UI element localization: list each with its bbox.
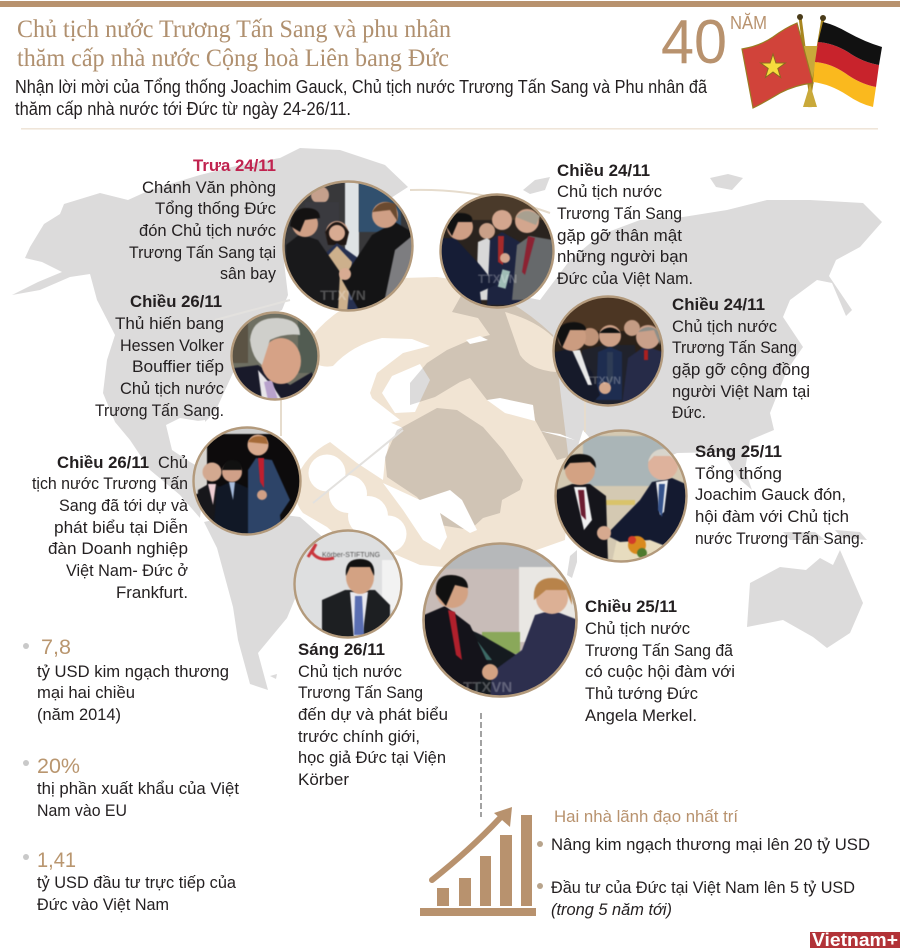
text: Chiều 26/11 forum: Frankfurt. (116, 583, 188, 602)
text: Chiều 26/11 forum: Việt Nam- Đức ở (66, 561, 188, 580)
40 years badge: NĂM (730, 13, 767, 33)
text: Chiều 26/11 forum: Sang đã tới dự và (59, 496, 189, 515)
text: Chiều 24/11 community (672, 295, 810, 422)
australia (747, 550, 863, 648)
title (17, 16, 451, 72)
text: Chiều 25/11: Trương Tấn Sang đã (585, 641, 734, 660)
text: Chiều 24/11 friends: những người bạn (557, 247, 688, 266)
agreement panel: Nâng kim ngạch thương mại lên 20 tỷ USD (551, 835, 870, 854)
text: Sáng 25/11: nước Trương Tấn Sang. (695, 529, 864, 548)
intro text: Nhận lời mời của Tổng thống Joachim Gauck, Chủ tịch nước Trương Tấn Sang và Phu nhân đã (15, 77, 708, 97)
text: Chiều 24/11 friends (557, 161, 693, 288)
text: Sáng 25/11: Tổng thống (695, 464, 782, 483)
text: Chiều 24/11 friends: Chiều 24/11 (557, 161, 650, 180)
north and central america (12, 148, 408, 518)
text: Chiều 24/11 community: Trương Tấn Sang (672, 338, 797, 357)
stat: 20%: thị phần xuất khẩu của Việt (37, 779, 239, 798)
title: Chủ tịch nước Trương Tấn Sang và phu nhân (17, 16, 451, 43)
photo: Chiều 26/11 Bouffier (232, 312, 320, 401)
text: Chiều 25/11: có cuộc hội đàm với (585, 662, 735, 681)
text: Chiều 26/11 Bouffier: Hessen Volker (120, 336, 224, 355)
text: Chiều 26/11 forum: Chủ (158, 453, 188, 472)
connecting lines (215, 190, 585, 503)
text: Chiều 26/11 forum (32, 453, 189, 602)
icon: crossed flags (742, 14, 882, 108)
photo: Trưa 24/11 (284, 182, 412, 312)
madagascar (567, 550, 577, 578)
text: Chiều 26/11 forum: đàn Doanh nghiệp (48, 539, 188, 558)
stat: 7,8: (năm 2014) (37, 705, 121, 724)
text: Chiều 25/11: Chủ tịch nước (585, 619, 690, 638)
text: Sáng 26/11: học giả Đức tại Viện (298, 748, 446, 767)
eurasia (410, 200, 882, 490)
text: Chiều 26/11 Bouffier: Bouffier tiếp (132, 357, 224, 376)
text: Chiều 26/11 forum: Chiều 26/11 (57, 453, 149, 472)
text: Sáng 26/11: Körber (298, 770, 349, 789)
text: Chiều 24/11 friends: gặp gỡ thân mật (557, 226, 682, 245)
stat: 1,41: Đức vào Việt Nam (37, 895, 169, 914)
africa (385, 408, 523, 530)
text: Trưa 24/11: Trương Tấn Sang tại (129, 243, 276, 262)
photo: Sáng 25/11 (556, 430, 688, 563)
text: Sáng 25/11: Sáng 25/11 (695, 442, 782, 461)
top bar (0, 1, 900, 7)
40 years badge: 40 (661, 8, 727, 77)
text: Sáng 26/11: Trương Tấn Sang (298, 683, 423, 702)
text: Sáng 25/11: hội đàm với Chủ tịch (695, 507, 849, 526)
text: Chiều 24/11 community: Chủ tịch nước (672, 317, 777, 336)
text: Sáng 25/11 (695, 442, 864, 548)
text: Chiều 26/11 forum: phát biểu tại Diễn (54, 518, 188, 537)
40 years badge (661, 8, 767, 77)
stat: 7,8: tỷ USD kim ngạch thương (37, 662, 229, 681)
photo: Chiều 24/11 friends (438, 194, 554, 310)
stat: 20% (23, 755, 239, 820)
photo: Chiều 24/11 community (553, 296, 663, 406)
text: Chiều 25/11: Thủ tướng Đức (585, 684, 698, 703)
text: Chiều 24/11 community: Đức. (672, 403, 706, 422)
text: Sáng 26/11: Sáng 26/11 (298, 640, 385, 659)
agreement panel (537, 807, 870, 919)
text: Chiều 26/11 Bouffier: Chiều 26/11 (130, 292, 222, 311)
text: Chiều 24/11 community: người Việt Nam tại (672, 382, 810, 401)
text: Sáng 26/11: trước chính giới, (298, 727, 420, 746)
handshake background (284, 277, 570, 570)
stat: 20%: Nam vào EU (37, 801, 127, 820)
text: Trưa 24/11 (129, 156, 276, 283)
agreement panel: Đầu tư của Đức tại Việt Nam lên 5 tỷ USD (551, 878, 855, 897)
dashed connector (480, 713, 482, 817)
text: Sáng 26/11: Chủ tịch nước (298, 662, 402, 681)
text: Chiều 25/11 (585, 597, 735, 725)
text: Chiều 26/11 Bouffier: Thủ hiến bang (115, 314, 224, 333)
agreement panel: Hai nhà lãnh đạo nhất trí (554, 807, 738, 826)
stat: 1,41: tỷ USD đầu tư trực tiếp của (37, 873, 237, 892)
photo: Chiều 26/11 forum (193, 427, 301, 535)
text: Chiều 24/11 community: Chiều 24/11 (672, 295, 765, 314)
text: Trưa 24/11: sân bay (220, 264, 276, 283)
text: Trưa 24/11: Chánh Văn phòng (142, 178, 276, 197)
text: Chiều 24/11 friends: Đức của Việt Nam. (557, 269, 693, 288)
text: Trưa 24/11: Trưa 24/11 (193, 156, 276, 175)
text: Chiều 26/11 forum: tịch nước Trương Tấn (32, 474, 188, 493)
world map (12, 148, 882, 690)
text: Chiều 26/11 Bouffier (95, 292, 224, 420)
stat: 7,8: 7,8 (41, 636, 71, 659)
photo: Trưa 24/11: TTXVN (320, 287, 366, 303)
stat: 7,8: mại hai chiều (37, 683, 135, 702)
islands (710, 174, 743, 190)
text: Chiều 25/11: Angela Merkel. (585, 706, 697, 725)
text: Sáng 25/11: Joachim Gauck đón, (695, 485, 846, 504)
text: Chiều 24/11 friends: Trương Tấn Sang (557, 204, 682, 223)
text: Chiều 25/11: Chiều 25/11 (585, 597, 677, 616)
intro text: thăm cấp nhà nước tới Đức từ ngày 24-26/11. (15, 99, 351, 119)
agreement panel: (trong 5 năm tới) (551, 900, 672, 919)
photo: Sáng 26/11: Körber-STIFTUNG (322, 552, 380, 559)
photo: Chiều 25/11 (424, 543, 578, 700)
icon: growth chart (420, 807, 536, 916)
stat: 1,41 (23, 849, 237, 914)
title: thăm cấp nhà nước Cộng hoà Liên bang Đức (17, 45, 449, 72)
text: Trưa 24/11: đón Chủ tịch nước (139, 221, 276, 240)
text: Chiều 26/11 Bouffier: Chủ tịch nước (120, 379, 224, 398)
stat: 7,8 (23, 636, 229, 724)
text: Trưa 24/11: Tổng thống Đức (155, 199, 276, 218)
text: Sáng 26/11: đến dự và phát biểu (298, 705, 448, 724)
text: Sáng 26/11 (298, 640, 448, 789)
photo: Chiều 24/11 community: TTXVN (585, 375, 621, 387)
photo: Chiều 24/11 friends: TTXVN (478, 272, 517, 286)
text: Chiều 24/11 community: gặp gỡ cộng đồng (672, 360, 810, 379)
text: Chiều 24/11 friends: Chủ tịch nước (557, 182, 662, 201)
stat: 20%: 20% (37, 755, 80, 778)
logo: Vietnam+: Vietnam+ (812, 930, 898, 950)
photo: Chiều 25/11: TTXVN (463, 679, 512, 696)
photo: Sáng 26/11 (294, 530, 402, 640)
stat: 1,41: 1,41 (37, 849, 76, 872)
hand overlays and sea details (167, 312, 575, 552)
intro text (15, 77, 708, 119)
south america (204, 512, 335, 690)
text: Chiều 26/11 Bouffier: Trương Tấn Sang. (95, 401, 224, 420)
divider (21, 128, 878, 130)
